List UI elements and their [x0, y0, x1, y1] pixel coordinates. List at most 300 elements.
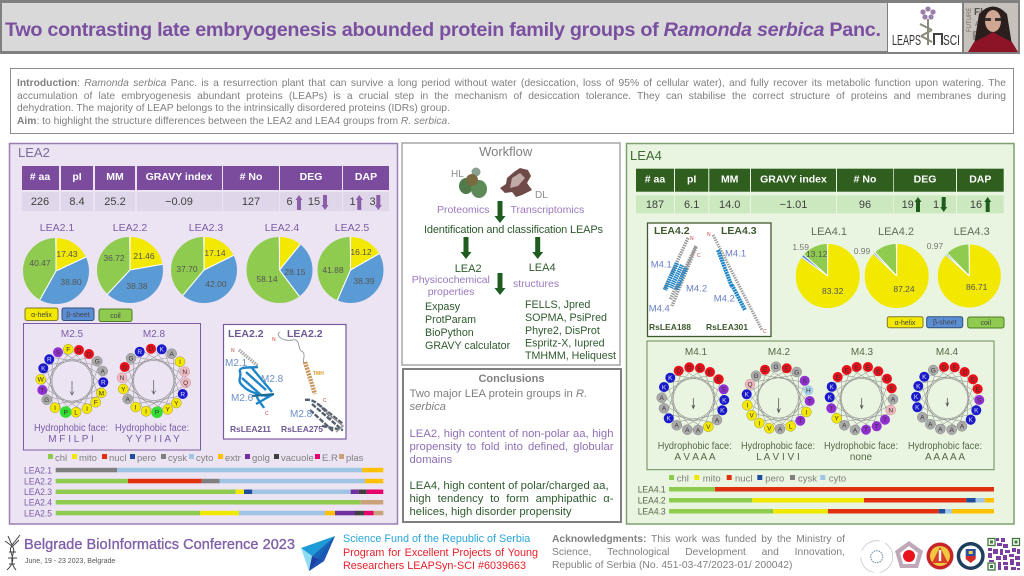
panel: LEA4 protein structures: N	[707, 232, 711, 238]
text: LEA4 tools: TMHMM, Heliquest	[525, 350, 616, 362]
table: LEA2 properties: DAP	[355, 171, 377, 183]
panel: workflow: Identification and classification LEAPs	[424, 224, 604, 236]
presenter photo: F D	[972, 28, 993, 43]
table: LEA4 properties: DEG	[914, 173, 936, 185]
panel: LEA4 protein structures: M4.2	[714, 294, 735, 305]
helical wheel M4.3: E	[890, 386, 895, 393]
panel: LEA4 protein structures: LEA4.3	[721, 225, 757, 237]
legend: subcellular localisation LEA2	[48, 453, 364, 464]
text: LEA2 tools: GRAVY calculator	[425, 340, 511, 352]
chart: LEA2.4 pie	[256, 222, 306, 296]
helical wheel M2.5: I	[54, 405, 56, 412]
heading: LEA2: LEA2	[18, 145, 50, 160]
helical wheel M2.5: G	[95, 359, 100, 366]
chart: LEA4.1 pie: 13.12	[806, 249, 828, 259]
helical wheel M2.5: M F I L P I	[48, 434, 94, 445]
chart: LEA4.3 pie: LEA4.3	[954, 226, 990, 238]
helical wheel M2.8: D	[149, 346, 154, 353]
legend: subcellular localisation LEA2: cyto	[196, 453, 213, 464]
helical wheel M2.5: F	[66, 347, 70, 354]
chart: LEA2.5 pie: 41.88	[322, 265, 344, 275]
panel: LEA4	[626, 144, 1014, 524]
chart: LEA4.1 pie: 83.32	[822, 286, 844, 296]
helical wheel M4.3: N	[888, 407, 893, 414]
panel: LEA2 protein structures: M2.8	[290, 409, 313, 420]
helical wheel M2.5: R	[101, 380, 106, 387]
helical wheel M4.2: G	[794, 369, 799, 376]
chart: LEA2.1 pie: 38.80	[60, 277, 82, 287]
panel: conclusions: Two major LEA protein groups in R.	[410, 388, 587, 400]
icon: DNA tree	[5, 535, 20, 570]
legend: secondary structure LEA2: α-helix	[31, 312, 52, 319]
heading: LEA4: LEA4	[630, 148, 662, 163]
helical wheel M2.8: R	[180, 391, 185, 398]
chart: LEA2.3 pie: LEA2.3	[189, 222, 223, 234]
legend: subcellular localisation LEA2: golg	[252, 453, 270, 464]
panel: LEA2 protein structures: LEA2.2	[287, 328, 323, 340]
helical wheel M4.4: A	[960, 424, 965, 431]
chart: LEA4.2 pie: 87.24	[893, 284, 915, 294]
panel: LEA2 protein structures: M2.6	[231, 393, 254, 404]
helical wheel M2.5: I	[86, 406, 88, 413]
chart: LEA4 subcellular localisation bars: LEA4.3	[638, 506, 666, 518]
presenter photo: A URE	[975, 21, 996, 28]
helical wheel M4.1: E	[717, 377, 722, 384]
helical wheel M4.2: E	[785, 366, 790, 373]
helical wheel M4.3: T	[875, 424, 879, 431]
table: LEA2 properties: pI	[72, 171, 82, 183]
helical wheel M4.2: H	[806, 388, 811, 395]
logo: red crest	[926, 542, 954, 570]
text: funding programme: Science Fund of the Republic of Serbia	[343, 533, 530, 545]
legend: secondary structure LEA4	[887, 317, 1004, 328]
text: LEA2 tools	[425, 301, 511, 352]
legend: subcellular localisation LEA4: pero	[765, 474, 784, 484]
helical wheel M2.5: M	[99, 390, 104, 397]
helical wheel M4.4: K	[969, 417, 974, 424]
helical wheel M4.2: V	[750, 413, 755, 420]
helical wheel M2.8: P	[155, 410, 159, 417]
table: LEA4 properties: 96	[859, 199, 871, 211]
arrow: to LEA4	[532, 237, 543, 259]
legend: subcellular localisation LEA2: nucl	[109, 453, 126, 464]
text: LEA4 tools: FELLS, Jpred	[525, 299, 590, 311]
panel: workflow	[402, 143, 620, 365]
chart: LEA4.1 pie: 1.59	[792, 242, 809, 252]
table: LEA2 properties: −0.09	[165, 196, 193, 208]
legend: subcellular localisation LEA4: mito	[703, 474, 721, 484]
legend: secondary structure LEA4: coil	[981, 320, 991, 327]
text: acknowledgments	[552, 534, 845, 571]
helical wheel M2.8: D	[122, 364, 127, 371]
table: LEA2 properties: DEG	[300, 171, 322, 183]
text: funding programme	[343, 533, 538, 572]
helical wheel M2.5: F	[94, 400, 98, 407]
table: LEA2 properties: 127	[242, 196, 260, 208]
helical wheel M4.1: K	[720, 408, 725, 415]
legend: subcellular localisation LEA2: pero	[137, 453, 156, 464]
table: LEA2 properties: # aa	[30, 171, 50, 183]
helical wheel M4.2: T	[798, 418, 802, 425]
chart: LEA2.2 pie: 21.46	[133, 251, 155, 261]
chart: LEA2 subcellular localisation bars: LEA2.5	[24, 508, 52, 520]
chart: LEA2.2 pie: 36.72	[103, 253, 125, 263]
footer: conference logo and title: June, 19 - 23 2023, Belgrade	[25, 558, 115, 565]
text: LEA4 tools: Phyre2, DisProt	[525, 325, 600, 337]
helical wheel M4.2: I	[758, 420, 760, 427]
panel: LEA2 protein structures: M2.8	[261, 374, 284, 385]
chart: LEA2.2 pie: 38.38	[126, 281, 148, 291]
legend: subcellular localisation LEA2: plas	[346, 453, 364, 464]
helical wheel M4.1: A V A A A	[674, 452, 716, 463]
helical wheel M4.2: Q	[747, 382, 753, 389]
helical wheel M2.8: Y	[121, 386, 126, 393]
chart: LEA2.1 pie: 40.47	[29, 258, 51, 268]
panel: LEA4 protein structures: M4.2	[686, 284, 707, 295]
table: LEA4 properties: GRAVY index	[760, 173, 827, 185]
chart: LEA4.2 pie	[854, 226, 915, 294]
helical wheel M2.8: Y	[174, 400, 179, 407]
table: LEA4 properties: 16	[970, 199, 982, 211]
helical wheel M4.3: none	[850, 452, 873, 463]
panel: introduction and aim: Introduction: Ramonda serbica Panc. is a resurrection plant that can survive a long period without water (desiccation, loss of 95% of cellular water), and fully recover its metabolic function upon watering. The	[17, 78, 1006, 88]
panel: conclusions: high tendency to form amphipathic α-	[410, 493, 614, 505]
legend: secondary structure LEA4: α-helix	[895, 320, 916, 327]
arrow: to LEA2	[460, 237, 472, 259]
legend: secondary structure LEA2: β-sheet	[66, 312, 90, 319]
legend: subcellular localisation LEA4: nucl	[735, 474, 752, 484]
table: LEA4 properties: 19	[902, 199, 914, 211]
chart: LEA4.3 pie: 0.97	[927, 241, 944, 251]
text: LEA4 tools: SOPMA, PsiPred	[525, 312, 607, 324]
panel: introduction and aim: accumulation of late embryogenesis abundant proteins (LEAPs) is a crucial step in the mechanism of desiccation tolerance. They can stabilise the correct structure of proteins and membranes during	[17, 90, 1006, 102]
table: LEA2 properties: 3	[369, 196, 376, 208]
helical wheel M2.8: G	[128, 356, 134, 363]
helical wheel M4.2: A	[778, 426, 783, 433]
helical wheel M4.3: E	[836, 374, 841, 381]
helical wheel M4.1: E	[698, 365, 703, 372]
chart: LEA2.1 pie: LEA2.1	[40, 222, 74, 234]
panel: conclusions: Conclusions	[478, 373, 544, 385]
helical wheel M4.2: T	[808, 398, 812, 405]
helical wheel M4.2: S	[803, 378, 808, 385]
helical wheel M2.5: W	[38, 377, 45, 384]
helical wheel M4.3: E	[845, 367, 850, 374]
chart: LEA2.4 pie: LEA2.4	[265, 222, 299, 234]
legend: secondary structure LEA2: coil	[110, 313, 121, 320]
helical wheel M4.2: V	[767, 426, 772, 433]
panel: workflow: structures	[513, 278, 559, 290]
helical wheel M4.4: A A A A A	[925, 452, 965, 463]
text: LEA4 tools	[525, 299, 616, 362]
text: LEA2 tools: BioPython	[425, 327, 474, 339]
chart: LEA2.3 pie: 37.70	[176, 264, 198, 274]
helical wheel M4.2: K	[745, 392, 750, 399]
helical wheel M4.4: E	[953, 365, 958, 372]
helical wheel M4.3: K	[830, 384, 835, 391]
table: LEA2 properties: 226	[31, 196, 49, 208]
table: LEA2 properties: GRAVY index	[146, 171, 213, 183]
chart: LEA4 subcellular localisation bars	[638, 484, 994, 518]
chart: LEA4.2 pie: LEA4.2	[878, 226, 914, 238]
icon: Science Fund kite logo	[301, 536, 335, 571]
arrow: to properties	[494, 273, 506, 295]
helical wheel M4.2: I	[746, 403, 748, 410]
panel: LEA4 protein structures: M4.1	[651, 260, 672, 271]
chart: LEA2.1 pie	[29, 222, 86, 300]
legend: subcellular localisation LEA4: cysk	[798, 474, 817, 484]
helical wheel M4.4: Hydrophobic face:	[908, 441, 982, 452]
helical wheel M4.1: K	[722, 397, 727, 404]
panel: LEA4 protein structures: C	[763, 329, 767, 335]
table: LEA2 properties: 15	[308, 196, 320, 208]
helical wheel M2.8: Y Y P I I A Y	[126, 434, 180, 445]
text: funding programme: Program for Excellent Projects of Young	[343, 546, 538, 558]
panel: LEA2	[10, 144, 398, 524]
legend: subcellular localisation LEA2: cysk	[168, 453, 187, 464]
panel: LEA4 protein structures	[648, 223, 771, 336]
panel: workflow: properties	[428, 286, 474, 298]
chart: LEA2.4 pie: 28.15	[284, 267, 306, 277]
chart: LEA4.2 pie: 0.99	[854, 246, 871, 256]
helical wheel M4.3: A	[842, 423, 847, 430]
helical wheel M4.4: K	[916, 383, 921, 390]
table: LEA4 properties: DAP	[969, 173, 991, 185]
panel: LEA2 protein structures: N	[231, 348, 235, 354]
chart: LEA2.2 pie: LEA2.2	[113, 222, 147, 234]
helical wheel M4.2: E	[763, 367, 768, 374]
chart: LEA4.1 pie	[792, 226, 847, 296]
text: LEA2 tools: ProtParam	[425, 314, 476, 326]
logo: LEAPS-SCI: SCI	[943, 32, 960, 49]
helical wheel M4.4: K	[915, 405, 920, 412]
QR code	[987, 538, 1020, 570]
logo: LEAPS-SCI: LEAPS	[892, 32, 921, 49]
chart: LEA2.5 pie: 38.39	[353, 276, 375, 286]
chart: LEA2.5 pie: 16.12	[350, 247, 372, 257]
helical wheel M4.1: E	[708, 369, 713, 376]
helical wheel M4.2: G	[753, 373, 759, 380]
panel: workflow: LEA2	[455, 263, 482, 275]
helical wheel M4.4: E	[976, 386, 981, 393]
panel: LEA2 protein structures: RsLEA211	[230, 424, 271, 434]
helical wheel M4.4: E	[971, 377, 976, 384]
helical wheel M4.1	[657, 347, 732, 463]
helical wheel M2.8: I	[145, 409, 147, 416]
helical wheel M4.1: D	[687, 365, 692, 372]
chart: LEA2 subcellular localisation bars	[24, 466, 383, 520]
helical wheel M4.3: Y	[835, 416, 840, 423]
table: LEA4 properties: 14.0	[719, 199, 740, 211]
panel: LEA2 protein structures: RsLEA275	[281, 424, 323, 434]
chart: LEA2 subcellular localisation bars: LEA2.1	[24, 466, 52, 476]
panel: LEA4 protein structures: RsLEA188	[649, 322, 691, 332]
chart: LEA2.5 pie: LEA2.5	[335, 222, 369, 234]
helical wheel M4.3: D	[885, 376, 890, 383]
legend: subcellular localisation LEA2: vacuole	[281, 453, 314, 464]
icon: desiccated leaf plant	[500, 168, 532, 197]
panel: LEA4 protein structures: M4.4	[649, 304, 670, 315]
helical wheel M2.5: A	[101, 368, 106, 375]
legend: subcellular localisation LEA4: cyto	[829, 474, 846, 484]
table: LEA4 properties: # aa	[645, 173, 665, 185]
helical wheel M2.8: N	[182, 369, 187, 376]
helical wheel M2.8: R	[137, 349, 142, 356]
helical wheel M2.5: P	[64, 409, 68, 416]
helical wheel M2.8: I	[135, 404, 137, 411]
panel: LEA2 protein structures: M2.1	[225, 358, 248, 369]
panel: workflow: Proteomics	[437, 204, 490, 216]
panel: LEA4 protein structures: LEA4.2	[654, 225, 690, 237]
chart: LEA2 subcellular localisation bars: LEA2.4	[24, 498, 52, 508]
helical wheel M2.8: N	[120, 375, 125, 382]
helical wheel M4.1: A	[715, 417, 720, 424]
legend: subcellular localisation LEA2: E.R	[322, 453, 338, 464]
chart: LEA2.3 pie: 17.14	[204, 248, 226, 258]
panel: conclusions: LEA2, high content of non-polar aa, high	[410, 428, 614, 440]
arrow: to identification	[494, 201, 506, 223]
chart: LEA2.3 pie	[176, 222, 234, 295]
helical wheel M2.5: T	[40, 387, 44, 394]
chart: LEA2.4 pie: 58.14	[256, 274, 278, 284]
helical wheel M4.4: G	[931, 367, 936, 374]
helical wheel M4.1: M4.1	[685, 347, 708, 358]
chart: LEA2.3 pie: 42.00	[205, 279, 227, 289]
helical wheel M2.8: M2.8	[143, 329, 166, 340]
panel: LEA4 protein structures: C	[697, 253, 701, 259]
helical wheel M2.5: G	[44, 397, 49, 404]
helical wheel M2.8: Y	[166, 407, 171, 414]
legend: secondary structure LEA2	[25, 308, 132, 322]
helical wheel M2.5: R	[47, 357, 52, 364]
table: LEA4 properties	[636, 169, 1004, 213]
helical wheel M4.1: A	[660, 395, 665, 402]
helical wheel M4.3: E	[876, 369, 881, 376]
helical wheel M4.1: D	[676, 368, 681, 375]
helical wheel M4.4: K	[974, 408, 979, 415]
helical wheel M2.8: A	[126, 396, 131, 403]
helical wheel M4.2: G	[773, 364, 779, 371]
helical wheel M4.1: K	[668, 375, 673, 382]
helical wheel M4.2: L	[789, 424, 793, 431]
helical wheel M4.1: S	[722, 387, 727, 394]
panel: LEA4 helical wheels	[647, 341, 994, 470]
panel: conclusions	[402, 368, 622, 523]
panel: LEA2 protein structures: C	[323, 398, 327, 404]
helical wheel M4.2: I	[805, 409, 807, 416]
chart: LEA4.3 pie: 86.71	[966, 282, 988, 292]
helical wheel M4.3: A	[891, 397, 896, 404]
helical wheel M4.1: A	[685, 427, 690, 434]
logo: ring	[861, 541, 893, 573]
table: LEA2 properties: 6	[286, 196, 293, 208]
table: LEA2 properties: 8.4	[69, 196, 85, 208]
panel: conclusions: LEA4, high content of polar/charged aa,	[410, 480, 609, 492]
helical wheel M2.8: A	[170, 351, 175, 358]
helical wheel M4.1: A	[675, 423, 680, 430]
helical wheel M4.1: A	[696, 427, 701, 434]
helical wheel M4.1: V	[706, 424, 711, 431]
table: LEA4 properties: MM	[721, 173, 739, 185]
panel: workflow: LEA4	[529, 262, 556, 274]
helical wheel M4.1: K	[667, 416, 672, 423]
table: LEA4 properties: # No	[854, 173, 876, 185]
helical wheel M2.8: Q	[183, 380, 188, 387]
chart: LEA4.1 pie: LEA4.1	[811, 226, 847, 238]
panel: LEA2 helical wheels	[24, 324, 200, 450]
presenter photo: FUTURE	[967, 8, 973, 32]
table: LEA2 properties	[22, 166, 389, 211]
helical wheel M4.3	[824, 347, 898, 463]
helical wheel M4.1: A	[662, 406, 667, 413]
chart: LEA4.3 pie	[927, 226, 990, 292]
helical wheel M4.4: K	[922, 374, 927, 381]
panel: LEA2 protein structures	[224, 324, 346, 439]
panel: LEA4 protein structures: M4.1	[725, 249, 746, 260]
panel: workflow: Physicochemical	[412, 274, 490, 286]
helical wheel M2.8: K	[160, 347, 165, 354]
panel: LEA2 protein structures: N	[272, 337, 276, 343]
footer: conference logo and title: Belgrade BioInformatics Conference 2023	[24, 537, 295, 553]
panel: LEA2 protein structures: TMH	[313, 371, 324, 377]
helical wheel M2.5: Hydrophobic face:	[34, 423, 108, 434]
logo: LEAPS-SCI	[888, 3, 962, 52]
helical wheel M4.4: D	[942, 364, 947, 371]
panel: workflow: HL	[451, 169, 464, 180]
table: LEA2 properties: MM	[106, 171, 124, 183]
text: acknowledgments: Republic of Serbia (No. 451-03-47/2023-01/ 200042)	[552, 560, 792, 571]
helical wheel M2.8: Hydrophobic face:	[115, 423, 189, 434]
table: LEA4 properties: pI	[687, 173, 696, 185]
helical wheel M4.3: Hydrophobic face:	[824, 441, 898, 452]
chart: LEA2.5 pie	[322, 222, 379, 300]
helical wheel M4.4: A	[928, 422, 933, 429]
panel: LEA4 protein structures: N	[690, 236, 694, 242]
logos: institutions	[861, 538, 1020, 573]
text: acknowledgments: Acknowledgments: This work was funded by the Ministry of	[552, 534, 845, 545]
panel: conclusions: helices, high disorder propensity	[410, 506, 572, 518]
footer: conference logo and title	[5, 535, 295, 570]
helical wheel M2.8: I	[179, 359, 181, 366]
legend: secondary structure LEA4: β-sheet	[933, 320, 956, 326]
helical wheel M4.4: D	[962, 369, 967, 376]
panel: conclusions: domains	[410, 454, 452, 466]
helical wheel M4.3: E	[855, 364, 860, 371]
panel: conclusions: propensity to fold into defined, globular	[410, 441, 614, 453]
helical wheel M2.5: L	[74, 410, 78, 417]
panel: LEA4 protein structures: RsLEA301	[706, 322, 748, 332]
text: funding programme: Researchers LEAPSyn-SCI #6039663	[343, 560, 526, 572]
legend: subcellular localisation LEA2: chl	[55, 453, 67, 464]
legend: subcellular localisation LEA2: extr	[225, 453, 241, 464]
logo: pentagon	[895, 541, 923, 568]
presenter photo	[964, 3, 1018, 52]
table: LEA2 properties: # No	[240, 171, 262, 183]
helical wheel M2.5: S	[56, 350, 61, 357]
helical wheel M4.3: T	[883, 417, 887, 424]
helical wheel M4.2: L A V I V I	[756, 452, 800, 463]
helical wheel M2.5: K	[41, 366, 46, 373]
legend: subcellular localisation LEA4: chl	[677, 474, 689, 484]
helical wheel M4.2: Hydrophobic face:	[741, 441, 815, 452]
helical wheel M4.3: E	[866, 364, 871, 371]
panel: introduction and aim	[10, 68, 1014, 134]
chart: LEA4 subcellular localisation bars: LEA4.1	[638, 484, 666, 496]
chart: LEA2.2 pie	[103, 222, 162, 294]
panel: introduction and aim: dehydration. The majority of LEAP belongs to the intrinsically disordered proteins (IDRs) group.	[17, 103, 450, 114]
table: LEA2 properties: 1	[349, 196, 356, 208]
chart: LEA2.1 pie: 17.43	[56, 249, 78, 259]
